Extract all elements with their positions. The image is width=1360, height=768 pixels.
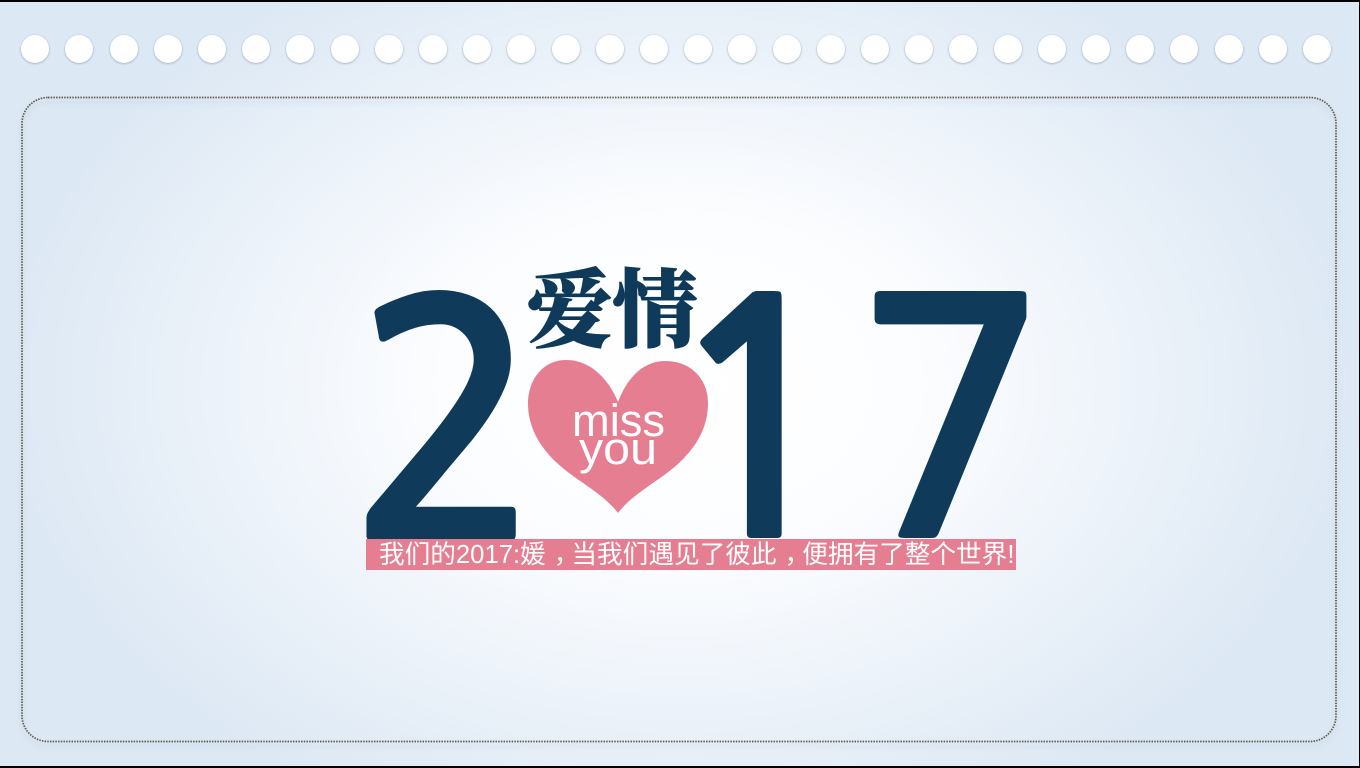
heart icon: [528, 360, 708, 513]
text: miss: miss: [572, 395, 665, 446]
calendar binding holes: [21, 35, 1331, 63]
big digit 1: 1: [658, 265, 855, 586]
caption background: [366, 539, 1016, 570]
big digit 7: 7: [854, 265, 1050, 586]
title: love: 爱情: [525, 265, 698, 359]
big digit 2: 2: [348, 267, 545, 588]
caption text: 我们的2017:媛 ，当我们遇见了彼此 ，便拥有了整个世界!: [379, 540, 1014, 569]
caption bar: [366, 539, 1016, 570]
heart with miss you: [528, 360, 708, 513]
text: you: you: [579, 423, 657, 474]
